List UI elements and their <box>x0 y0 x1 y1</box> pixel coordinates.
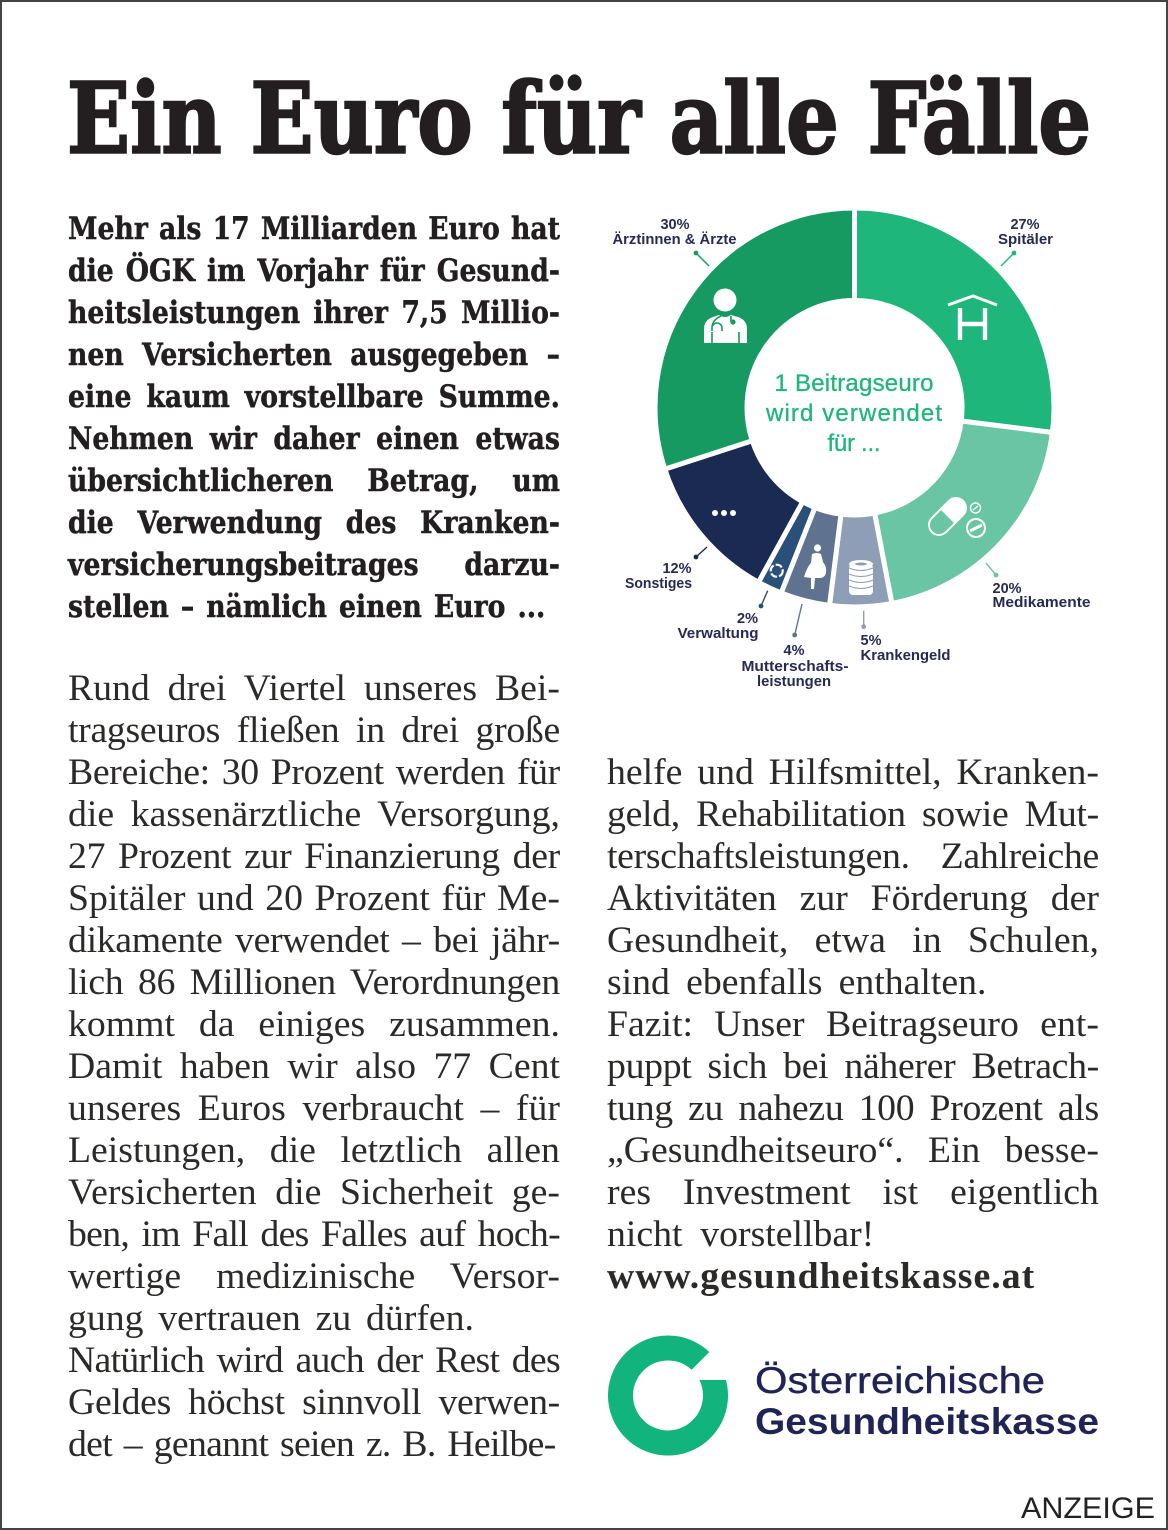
icon: hospital <box>948 296 997 340</box>
label: Spitäler 27%: Spitäler <box>998 232 1053 248</box>
body text: left column: lich 86 Millionen Verordnungen <box>68 962 560 1003</box>
slice: Medikamente 20% <box>875 421 1052 604</box>
label: Sonstiges 12%: Sonstiges <box>625 576 692 592</box>
logo wordmark <box>755 1360 1099 1442</box>
label: Medikamente 20%: 20% <box>992 581 1022 597</box>
body text: left column: wertige medizinische Versor- <box>68 1256 560 1297</box>
logo mark <box>608 1336 728 1456</box>
intro text <box>67 210 560 624</box>
body text: left column: kommt da einiges zusammen. <box>68 1004 560 1045</box>
body text: right column: terschaftsleistungen. Zahlreiche <box>607 836 1099 877</box>
slice: Ärztinnen und Ärzte 30% <box>655 208 854 469</box>
icon: gear <box>771 565 783 577</box>
body text: right column: www.gesundheitskasse.at <box>607 1256 1035 1297</box>
label: Spitäler 27% <box>998 217 1053 266</box>
intro text: übersichtlicheren Betrag, um <box>68 462 560 498</box>
body text: right column: geld, Rehabilitation sowie Mut- <box>607 794 1099 835</box>
label: Sonstiges 12% <box>625 547 707 592</box>
icon: coins <box>849 560 873 595</box>
body text: left column: Geldes höchst sinnvoll verwen- <box>68 1382 560 1423</box>
body text: right column: tung zu nahezu 100 Prozent als <box>607 1088 1099 1129</box>
body text: left column: tragseuros fließen in drei große <box>68 710 560 751</box>
label: Mutterschaftsleistungen 4%: Mutterschafts- <box>742 659 849 675</box>
donut centre text: für ... <box>828 430 880 457</box>
body text: left column: Bereiche: 30 Prozent werden für <box>68 752 560 793</box>
intro text: eine kaum vorstellbare Summe. <box>68 378 560 414</box>
intro text: Nehmen wir daher einen etwas <box>68 420 560 456</box>
logo wordmark: Österreichische <box>755 1360 1045 1401</box>
label: ANZEIGE: ANZEIGE <box>1021 1492 1155 1525</box>
icon: pregnant woman <box>804 544 826 589</box>
icon: three dots <box>712 510 736 516</box>
donut centre text <box>765 370 942 457</box>
body text: left column: die kassenärztliche Versorgung, <box>68 794 560 835</box>
intro text: die Verwendung des Kranken- <box>68 504 560 540</box>
body text: right column: „Gesundheitseuro“. Ein besse- <box>607 1130 1099 1171</box>
intro text: Mehr als 17 Milliarden Euro hat <box>68 210 560 246</box>
slice: Mutterschaftsleistungen 4% <box>781 508 841 605</box>
label: Verwaltung 2%: Verwaltung <box>678 626 758 642</box>
label: Krankengeld 5%: 5% <box>860 633 882 649</box>
intro text: stellen – nämlich einen Euro ... <box>68 588 545 624</box>
label: Mutterschaftsleistungen 4%: leistungen <box>757 674 831 690</box>
body text: right column <box>607 752 1099 1297</box>
body text: left column: gung vertrauen zu dürfen. <box>68 1298 474 1339</box>
body text: left column: Rund drei Viertel unseres Bei- <box>68 668 560 709</box>
label: Ärztinnen & Ärzte 30%: Ärztinnen & Ärzte <box>612 231 736 248</box>
donut chart <box>655 208 1054 607</box>
body text: right column: sind ebenfalls enthalten. <box>607 962 986 1003</box>
donut centre text: 1 Beitragseuro <box>774 370 934 397</box>
body text: left column: ben, im Fall des Falles auf hoch- <box>68 1214 560 1255</box>
logo: Österreichische Gesundheitskasse <box>608 1336 1099 1456</box>
label: Mutterschaftsleistungen 4%: 4% <box>784 643 805 659</box>
body text: right column: Fazit: Unser Beitragseuro ent- <box>607 1004 1099 1045</box>
body text: left column: unseres Euros verbraucht – für <box>68 1088 560 1129</box>
body text: left column <box>68 668 560 1465</box>
slice: Krankengeld 5% <box>830 513 892 607</box>
slice: Spitäler 27% <box>854 208 1054 432</box>
body text: right column: helfe und Hilfsmittel, Kranken- <box>607 752 1099 793</box>
body text: left column: dikamente verwendet – bei jähr- <box>68 920 560 961</box>
body text: right column: puppt sich bei näherer Betrach- <box>607 1046 1099 1087</box>
body text: left column: Damit haben wir also 77 Cent <box>68 1046 560 1087</box>
label: Krankengeld 5%: Krankengeld <box>860 648 950 664</box>
intro text: versicherungsbeitrages darzu- <box>68 546 560 582</box>
body text: right column: nicht vorstellbar! <box>607 1214 874 1255</box>
label: Krankengeld 5% <box>860 611 950 664</box>
intro text: die ÖGK im Vorjahr für Gesund- <box>68 252 560 288</box>
body text: left column: Versicherten die Sicherheit ge- <box>68 1172 560 1213</box>
label: Spitäler 27%: 27% <box>1010 217 1040 233</box>
body text: left column: Leistungen, die letztlich allen <box>68 1130 560 1171</box>
label: Sonstiges 12%: 12% <box>662 561 692 577</box>
icon: pills <box>925 494 985 539</box>
intro text: nen Versicherten ausgegeben – <box>68 336 560 372</box>
label: Verwaltung 2% <box>678 591 768 642</box>
body text: right column: Gesundheit, etwa in Schulen, <box>607 920 1099 961</box>
body text: right column: Aktivitäten zur Förderung der <box>607 878 1099 919</box>
body text: right column: res Investment ist eigentlich <box>607 1172 1099 1213</box>
body text: left column: Spitäler und 20 Prozent für Me- <box>68 878 560 919</box>
label: Ärztinnen & Ärzte 30%: 30% <box>660 217 690 233</box>
label: Mutterschaftsleistungen 4% <box>742 604 849 690</box>
donut centre text: wird verwendet <box>765 400 942 427</box>
slice: Verwaltung 2% <box>758 502 815 593</box>
logo wordmark: Gesundheitskasse <box>755 1401 1099 1442</box>
label: Verwaltung 2%: 2% <box>737 611 758 627</box>
intro text: heitsleistungen ihrer 7,5 Millio- <box>68 294 560 330</box>
body text: left column: det – genannt seien z. B. Heilbe- <box>68 1424 556 1465</box>
label: Medikamente 20%: Medikamente <box>992 595 1090 611</box>
slice: Sonstiges 12% <box>665 441 803 582</box>
icon: doctor <box>704 288 747 343</box>
label: Ärztinnen & Ärzte 30% <box>612 217 736 266</box>
body text: left column: 27 Prozent zur Finanzierung der <box>68 836 560 877</box>
label: Medikamente 20% <box>986 563 1090 611</box>
body text: left column: Natürlich wird auch der Rest des <box>68 1340 560 1381</box>
